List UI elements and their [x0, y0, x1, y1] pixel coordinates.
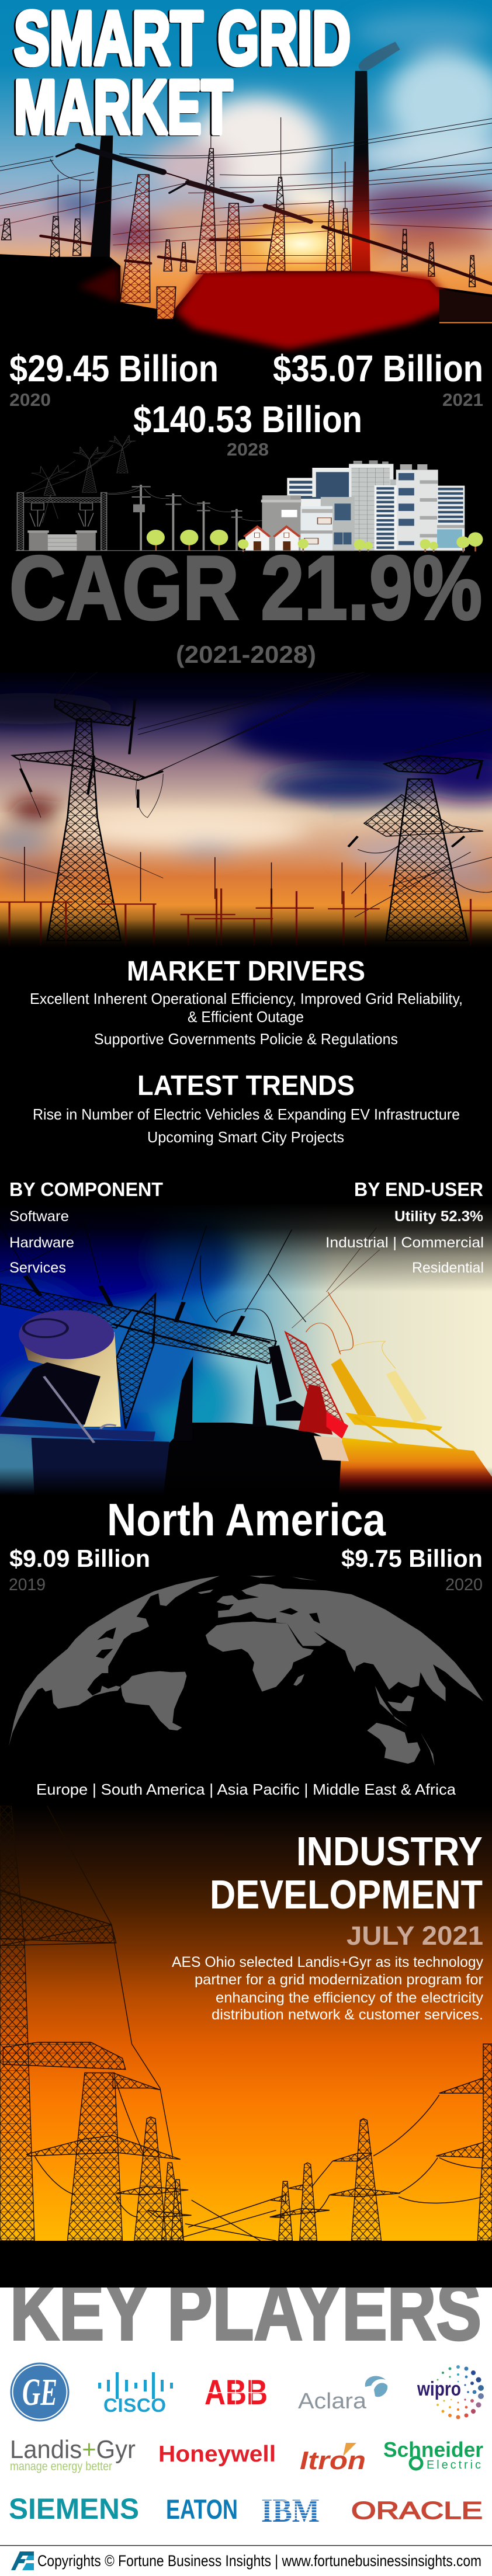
logo: Itron: Itron — [300, 2446, 366, 2475]
year: 2028 — [227, 439, 269, 460]
greenland and arctic — [198, 1576, 317, 1594]
item: Utility 52.3% — [394, 1208, 483, 1225]
heading: MARKET DRIVERS — [127, 956, 365, 987]
insulators — [173, 1345, 311, 1441]
left dark chimney — [91, 135, 113, 258]
item: Hardware — [9, 1235, 74, 1251]
date: JULY 2021 — [347, 1921, 483, 1951]
black ground with red glow — [0, 254, 492, 365]
power wires — [0, 119, 492, 263]
heading: BY END-USER — [354, 1179, 483, 1200]
madagascar — [293, 1674, 304, 1686]
pylons — [2, 117, 476, 319]
segment: by end-user — [325, 1179, 484, 1276]
industry development panel background — [0, 1806, 492, 2241]
industry development description: partner for a grid modernization program for — [195, 1972, 483, 1988]
lower right glow — [339, 1438, 492, 1497]
hero image: power lines at sunset — [0, 0, 492, 365]
north america heading: North America — [107, 1494, 386, 1545]
logo: ABB: ABB — [205, 2373, 268, 2412]
title — [14, 0, 351, 150]
wires — [0, 1222, 396, 1368]
market drivers — [30, 956, 463, 1048]
logo: IBM: IBM — [261, 2492, 320, 2529]
industry development description — [172, 1954, 484, 2023]
trend 1: Rise in Number of Electric Vehicles & Expanding EV Infrastructure — [33, 1106, 460, 1123]
logo: Siemens: SIEMENS — [9, 2492, 139, 2525]
black strip — [0, 2241, 492, 2288]
year: 2020 — [445, 1576, 483, 1594]
driver 1 — [30, 990, 463, 1025]
diagonal gantry — [41, 146, 492, 284]
stat 2028 — [133, 398, 362, 460]
footer logo icon — [11, 2551, 34, 2570]
CAGR period: (2021-2028) — [176, 641, 316, 668]
transmission towers — [23, 435, 136, 523]
value: $9.75 Billion — [341, 1545, 483, 1572]
title line 2: MARKET — [14, 64, 233, 150]
industry development heading — [210, 1828, 483, 1917]
year: 2019 — [9, 1576, 46, 1594]
right chimney with smoke — [351, 41, 400, 271]
other regions list: Europe | South America | Asia Pacific | Middle East & Africa — [36, 1781, 456, 1798]
footer divider — [0, 2545, 492, 2546]
heading: LATEST TRENDS — [137, 1070, 355, 1101]
value: $140.53 Billion — [133, 398, 362, 440]
item: Industrial | Commercial — [325, 1235, 484, 1251]
trees — [147, 530, 483, 552]
illustration: grid to city — [16, 435, 483, 552]
panel — [314, 1435, 349, 1461]
item: Residential — [412, 1260, 484, 1276]
item: Software — [9, 1208, 69, 1225]
latest trends — [33, 1070, 460, 1146]
right pylon — [348, 756, 483, 941]
north america land — [9, 1576, 220, 1746]
logo: Aclara: Aclara — [298, 2389, 367, 2414]
africa land — [206, 1622, 314, 1692]
logo: Cisco: CISCO — [103, 2394, 166, 2416]
logo: Honeywell: Honeywell — [158, 2442, 276, 2467]
third image: substation — [0, 1191, 492, 1507]
world globe — [9, 1576, 483, 1765]
utility poles — [107, 485, 305, 551]
logo: Wipro — [417, 2365, 484, 2419]
south america land — [121, 1671, 187, 1730]
segment: by component — [9, 1179, 163, 1276]
value: $29.45 Billion — [9, 347, 219, 390]
logo: Schneider Electric: Electric — [427, 2459, 481, 2471]
stat 2020 — [9, 347, 219, 410]
driver 1: Excellent Inherent Operational Efficiency, Improved Grid Reliability, — [30, 990, 463, 1007]
second image: pylons at dusk — [0, 672, 492, 956]
logo: Eaton: EATON — [166, 2494, 238, 2525]
steel truss — [0, 1276, 276, 1428]
indonesia islands — [375, 1686, 435, 1765]
year: 2020 — [9, 390, 51, 410]
logo: Landis+Gyr: manage energy better — [10, 2460, 112, 2473]
heading: BY COMPONENT — [9, 1179, 163, 1200]
logo: Schneider Electric: Schneider — [383, 2438, 483, 2462]
logo: GE: GE — [22, 2371, 57, 2414]
australia land — [367, 1723, 421, 1764]
north america stat 2020 — [341, 1545, 483, 1594]
transformer cylinder — [19, 1310, 121, 1427]
wires — [0, 672, 492, 917]
logo: Oracle: ORACLE — [351, 2497, 483, 2524]
logo: Cisco — [98, 2372, 173, 2416]
logo: Landis+Gyr: Landis+Gyr — [10, 2435, 136, 2464]
logo: Aclara — [298, 2376, 387, 2414]
transformer body — [0, 1362, 169, 1497]
item: Services — [9, 1260, 66, 1276]
logo: Wipro: wipro — [417, 2378, 461, 2400]
value: $9.09 Billion — [9, 1545, 150, 1572]
trend 2: Upcoming Smart City Projects — [147, 1128, 344, 1146]
eurasia land — [217, 1584, 483, 1701]
industry development description: AES Ohio selected Landis+Gyr as its technology — [172, 1954, 483, 1970]
central silhouette — [163, 1423, 348, 1497]
north america stat 2019 — [9, 1545, 150, 1594]
driver 1: & Efficient Outage — [188, 1008, 304, 1025]
city buildings — [261, 460, 465, 551]
industry development description: enhancing the efficiency of the electricity — [216, 1990, 484, 2006]
red lattice — [286, 1332, 348, 1439]
houses — [244, 527, 300, 551]
industry development description: distribution network & customer services. — [212, 2007, 483, 2023]
yellow insulators — [331, 1358, 458, 1451]
driver 2: Supportive Governments Policie & Regulations — [94, 1030, 398, 1048]
logo: GE — [11, 2363, 69, 2421]
industry development pylons — [0, 1803, 492, 2241]
stat 2021 — [273, 347, 483, 410]
logo: Schneider Electric — [383, 2438, 483, 2471]
white footer area — [0, 2288, 492, 2576]
year: 2021 — [442, 390, 483, 410]
left pylon — [12, 700, 163, 941]
distant substations — [0, 847, 492, 946]
transformers — [27, 530, 97, 551]
substation frame — [18, 492, 107, 550]
